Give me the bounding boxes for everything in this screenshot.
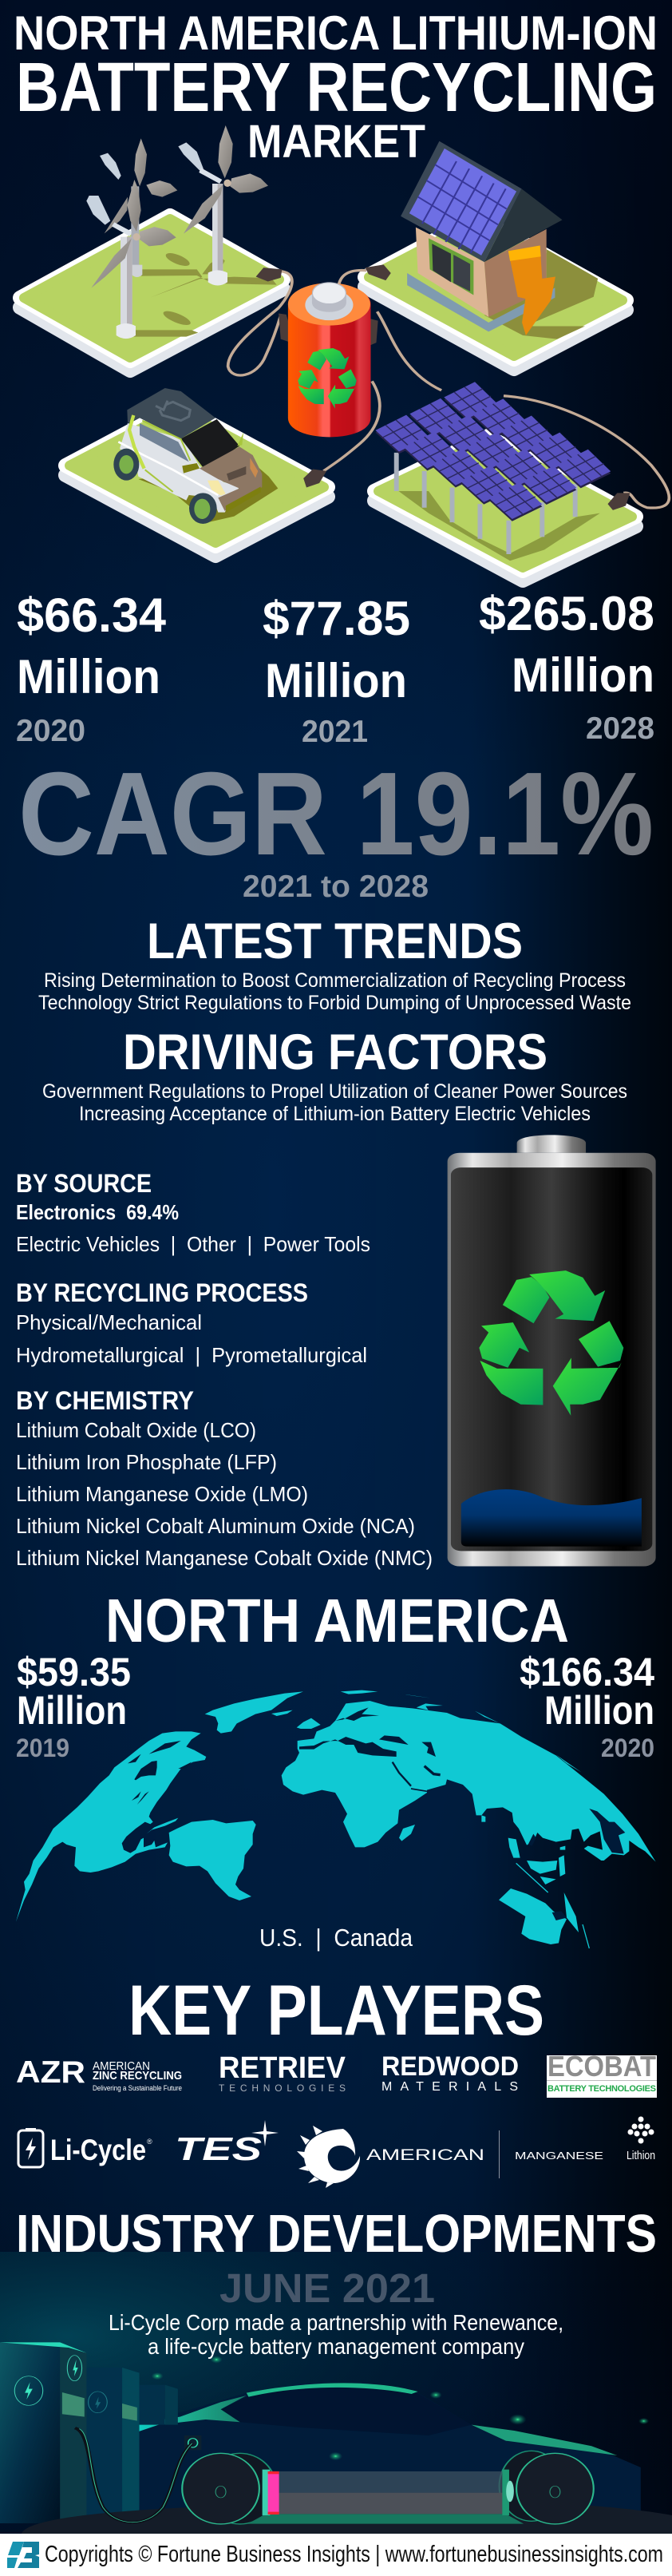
- CAGR period: 2021 to 2028: [243, 870, 429, 904]
- segment: by source: BY SOURCE: [16, 1169, 152, 1198]
- stat: 2028 value: 2028: [586, 711, 654, 746]
- text: latest trends: Technology Strict Regulations to Forbid Dumping of Unprocessed Waste: [38, 992, 631, 1014]
- segment: by recycling process: [16, 1278, 367, 1367]
- logo: Redwood Materials: REDWOOD: [381, 2051, 519, 2082]
- text: driving factors: Government Regulations to Propel Utilization of Cleaner Power Sources: [42, 1080, 627, 1103]
- logo: American Zinc Recycling: ZINC RECYCLING: [93, 2069, 182, 2083]
- landmass: north america: [16, 1731, 206, 1922]
- date: JUNE 2021: [219, 2265, 435, 2311]
- landmass: eurasia and africa: [282, 1701, 656, 1862]
- platform: electric car: [65, 406, 328, 556]
- landmass: south america: [169, 1820, 256, 1900]
- title: [14, 6, 658, 168]
- logo: American Zinc Recycling: AZR: [16, 2055, 85, 2090]
- logo: American Zinc Recycling: Delivering a Sustainable Future: [93, 2084, 182, 2092]
- logo: American Manganese: [297, 2126, 603, 2188]
- stat: 2020 value: $66.34: [17, 589, 167, 642]
- text: countries: U.S. | Canada: [259, 1924, 413, 1952]
- heading: key players: KEY PLAYERS: [128, 1970, 544, 2050]
- segment: by recycling process: Physical/Mechanical: [16, 1310, 202, 1334]
- logo: American Zinc Recycling: AMERICAN: [93, 2059, 150, 2073]
- logo: Ecobat Battery Technologies: [547, 2050, 657, 2098]
- battery cell: [263, 2470, 514, 2515]
- text: development detail: a life-cycle battery management company: [148, 2334, 524, 2359]
- segment: by chemistry: Lithium Nickel Manganese Cobalt Oxide (NMC): [16, 1546, 433, 1570]
- EV charging scene: [0, 2252, 672, 2534]
- logo: TES: TES: [175, 2130, 262, 2167]
- stat: 2019 regional value: 2019: [16, 1734, 69, 1762]
- platform: solar array: [374, 436, 636, 581]
- icon: central recycling battery: [288, 282, 371, 437]
- stat: 2019 regional value: Million: [17, 1688, 127, 1733]
- platform: wind farm: [20, 216, 283, 371]
- logo: Retriev Technologies: RETRIEV: [219, 2051, 346, 2085]
- segment: by chemistry: Lithium Manganese Oxide (LMO): [16, 1482, 308, 1506]
- stat: 2021 value: [263, 592, 410, 749]
- segment: by recycling process: BY RECYCLING PROCESS: [16, 1278, 308, 1307]
- platform: house: [365, 217, 627, 369]
- logo: TES: [175, 2120, 279, 2167]
- segment: by chemistry: Lithium Cobalt Oxide (LCO): [16, 1418, 256, 1442]
- text: latest trends: [38, 969, 631, 1014]
- floor glow: [247, 2514, 524, 2524]
- landmass: asian islands: [341, 1690, 581, 1932]
- stat: 2019 regional value: [16, 1650, 131, 1762]
- stat: 2021 value: 2021: [302, 715, 368, 749]
- icon: house with solar roof: [401, 141, 598, 339]
- stat: 2028 value: $265.08: [479, 587, 654, 640]
- text: driving factors: [42, 1080, 627, 1125]
- globe map: [16, 1690, 656, 1948]
- ground: [22, 2499, 672, 2534]
- landmass: uk and iceland: [271, 1710, 321, 1729]
- car silhouette: [135, 2383, 641, 2523]
- segment: by chemistry: Lithium Iron Phosphate (LFP): [16, 1450, 277, 1474]
- logo: Li-Cycle: ®: [147, 2138, 152, 2146]
- stat: 2019 regional value: $59.35: [17, 1650, 131, 1694]
- logo: Redwood Materials: MATERIALS: [381, 2080, 518, 2094]
- logo: Redwood Materials: [381, 2051, 519, 2094]
- text: development detail: Li-Cycle Corp made a partnership with Renewance,: [109, 2310, 563, 2335]
- sea cut-outs: [128, 1707, 625, 1920]
- heading: north america: NORTH AMERICA: [105, 1587, 569, 1655]
- segment: by source: [16, 1169, 370, 1256]
- stat: 2028 value: [479, 587, 654, 746]
- stat: 2020 value: Million: [17, 650, 160, 703]
- stat: 2028 value: Million: [512, 648, 654, 702]
- landmass: madagascar and sri lanka: [399, 1815, 485, 1841]
- stat: 2020 regional value: Million: [544, 1688, 654, 1733]
- logo: Ecobat Battery Technologies: BATTERY TECHNOLOGIES: [547, 2084, 656, 2094]
- charging cable: [75, 2428, 192, 2522]
- segment: by chemistry: BY CHEMISTRY: [16, 1386, 194, 1415]
- icon: large battery with recycling symbol: [448, 1135, 656, 1567]
- landmass: greenland: [205, 1691, 303, 1734]
- stat: 2020 regional value: 2020: [601, 1734, 654, 1762]
- logo: Li-Cycle: Li-Cycle: [50, 2134, 146, 2166]
- stat: 2021 value: Million: [265, 654, 407, 707]
- title: MARKET: [247, 116, 425, 168]
- text: driving factors: Increasing Acceptance of Lithium-ion Battery Electric Vehicles: [79, 1103, 591, 1125]
- stat: 2020 regional value: $166.34: [520, 1650, 654, 1694]
- segment: by recycling process: Hydrometallurgical | Pyrometallurgical: [16, 1343, 367, 1367]
- logo: Lithion: [627, 2116, 655, 2162]
- text: development detail: [109, 2310, 563, 2359]
- logo: American Zinc Recycling: [16, 2055, 182, 2092]
- icon: electric car: [113, 388, 278, 524]
- icon: solar panels: [375, 382, 611, 561]
- text: latest trends: Rising Determination to Boost Commercialization of Recycling Process: [44, 969, 626, 992]
- stat: 2021 value: $77.85: [263, 592, 410, 645]
- segment: by chemistry: Lithium Nickel Cobalt Aluminum Oxide (NCA): [16, 1514, 415, 1538]
- landmass: australia: [499, 1888, 567, 1944]
- segment: by source: Electronics 69.4%: [16, 1200, 179, 1224]
- cables and plugs: [228, 264, 669, 510]
- logo: Ecobat Battery Technologies: ECOBAT: [547, 2050, 656, 2083]
- segment: by chemistry: [16, 1386, 433, 1570]
- logo: Lithion: Lithion: [627, 2149, 655, 2162]
- stat: 2020 regional value: [520, 1650, 654, 1762]
- logo: Li-Cycle: [18, 2128, 152, 2167]
- stat: 2020 value: [16, 589, 167, 748]
- segment: by source: Electric Vehicles | Other | Power Tools: [16, 1232, 370, 1256]
- wheels: [182, 2451, 594, 2524]
- heading: latest trends: LATEST TRENDS: [147, 913, 523, 969]
- icon: wind turbines: [86, 125, 277, 339]
- logo: Retriev Technologies: TECHNOLOGIES: [219, 2083, 346, 2094]
- logo: American Manganese: MANGANESE: [515, 2150, 603, 2162]
- chargers: [0, 2342, 178, 2523]
- landmass: cuba: [146, 1818, 178, 1834]
- logo: Fortune Business Insights: [7, 2542, 39, 2568]
- heading: driving factors: DRIVING FACTORS: [123, 1024, 547, 1080]
- glow dots: [152, 2356, 649, 2460]
- logo: American Manganese: AMERICAN: [366, 2147, 484, 2164]
- stat: 2020 value: 2020: [16, 714, 85, 748]
- footer: [0, 2534, 672, 2576]
